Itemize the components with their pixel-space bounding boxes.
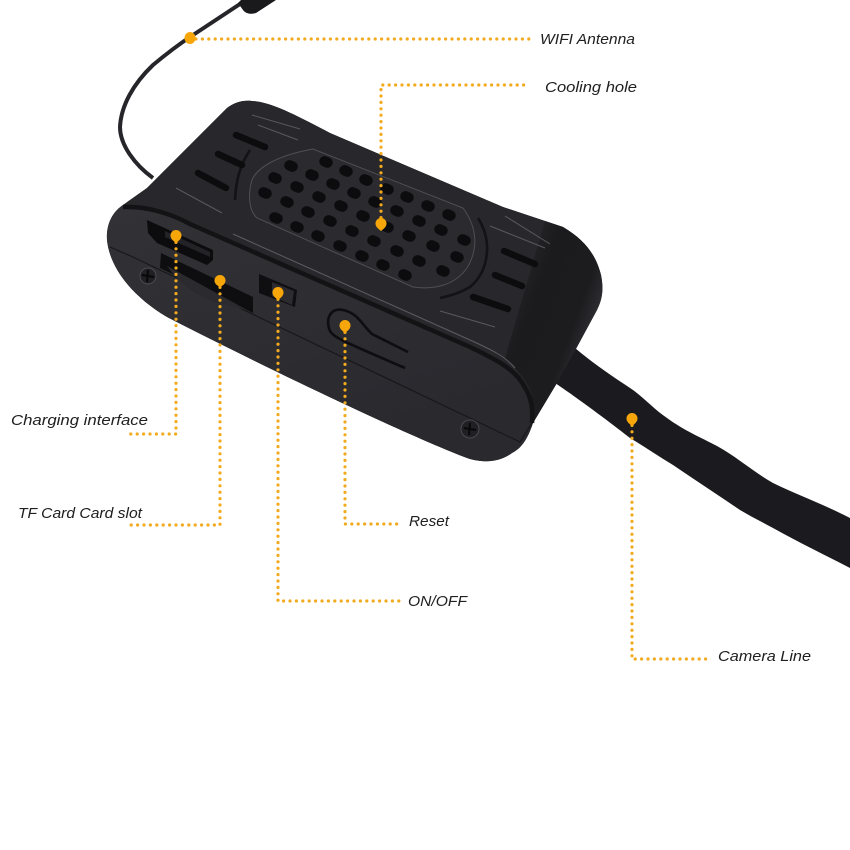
antenna cable: [120, 0, 276, 178]
callout: TF Card Card slot: TF Card Card slot: [18, 506, 143, 522]
top face: [123, 101, 567, 372]
on/off switch: [259, 274, 297, 307]
callout: Cooling hole: [376, 80, 637, 231]
lid seam: [110, 247, 532, 442]
callout: Charging interface: Charging interface: [11, 413, 148, 429]
charging port: [147, 220, 213, 265]
callout: Cooling hole: Cooling hole: [545, 80, 637, 96]
camera ribbon cable: [540, 335, 850, 568]
TF card slot: [160, 253, 253, 313]
callout: WIFI Antenna: [184, 32, 635, 48]
vents: left: [176, 115, 300, 213]
panel: speaker grille: [235, 149, 487, 298]
callout: ON/OFF: [272, 287, 468, 610]
device body: [107, 101, 602, 461]
callout: ON/OFF: ON/OFF: [408, 594, 468, 610]
callout: Camera Line: Camera Line: [718, 649, 811, 665]
vents: right: [440, 216, 550, 327]
body silhouette: [107, 101, 602, 461]
callout: Charging interface: [11, 230, 182, 434]
cooling holes: [264, 161, 466, 276]
callout: TF Card Card slot: [18, 275, 226, 525]
callout: Reset: Reset: [409, 514, 450, 530]
callout: WIFI Antenna: WIFI Antenna: [540, 32, 635, 48]
callout: Reset: [340, 320, 450, 530]
screw: right: [461, 420, 479, 438]
front face: [107, 205, 534, 461]
callout: Camera Line: [626, 413, 811, 665]
right end cap: [505, 221, 602, 423]
front rim: [123, 207, 532, 423]
screw: left: [140, 268, 156, 284]
reset button: [328, 310, 408, 368]
